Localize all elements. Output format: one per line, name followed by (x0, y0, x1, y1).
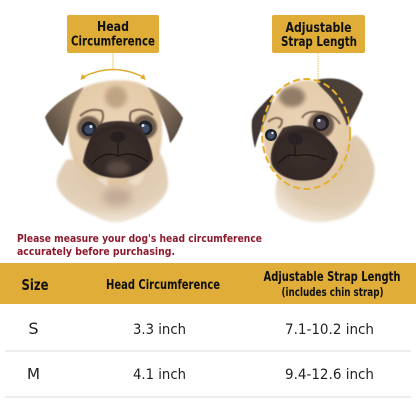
nose (288, 133, 302, 145)
neck shadow (102, 188, 132, 206)
illustration: angled pug (252, 78, 375, 222)
eye: left (82, 122, 96, 136)
warning text: Please measure your dog's head circumference (17, 232, 262, 245)
lower lip (106, 161, 130, 175)
row: S: S (28, 319, 39, 338)
muzzle (83, 121, 153, 178)
strap loop: dashed ellipse (262, 79, 350, 189)
row: S: 7.1-10.2 inch (285, 322, 374, 338)
body (275, 135, 375, 222)
body (57, 150, 168, 222)
eye patch (308, 112, 334, 138)
forehead wrinkles (279, 87, 305, 107)
mouth (278, 146, 326, 164)
nose (110, 132, 126, 142)
head (68, 80, 162, 184)
ear: left (45, 87, 84, 146)
brow wrinkles (80, 110, 153, 124)
head (263, 80, 350, 184)
ear: right (147, 87, 183, 143)
brow wrinkles (268, 112, 340, 128)
warning text (17, 232, 262, 258)
label: head circumference (67, 15, 159, 53)
connector: head label to arc (112, 53, 114, 70)
row: M: M (27, 365, 40, 383)
row: S (28, 319, 374, 338)
forehead wrinkle (105, 86, 127, 108)
row: M (27, 365, 374, 383)
muzzle (271, 125, 338, 181)
eye: right (138, 120, 152, 136)
label: head circumference: Circumference (71, 34, 155, 50)
illustration: front-facing pug (45, 80, 183, 222)
row: M: 4.1 inch (133, 367, 186, 383)
warning text: accurately before purchasing. (17, 245, 175, 258)
eye patch: right (133, 115, 157, 139)
mouth (92, 143, 148, 164)
size table (0, 263, 416, 397)
label: adjustable strap length: Adjustable (286, 21, 352, 36)
connector: strap label to loop (317, 53, 319, 80)
table header (0, 263, 416, 304)
table header: Head Circumference (106, 277, 220, 293)
row: S: 3.3 inch (133, 322, 186, 338)
label: adjustable strap length (272, 15, 365, 53)
eye patch: left (77, 116, 101, 140)
label: adjustable strap length: Strap Length (281, 35, 357, 50)
label: head circumference: Head (97, 20, 129, 35)
row: M: 9.4-12.6 inch (285, 367, 374, 383)
ear: right (317, 78, 363, 126)
table header: Size (22, 276, 48, 294)
table header: (includes chin strap) (282, 285, 384, 299)
chest folds (95, 172, 146, 186)
eye: left (265, 129, 277, 141)
ear: left (252, 94, 273, 148)
arrow: curved head measure (80, 70, 146, 80)
eye: right (313, 115, 329, 131)
